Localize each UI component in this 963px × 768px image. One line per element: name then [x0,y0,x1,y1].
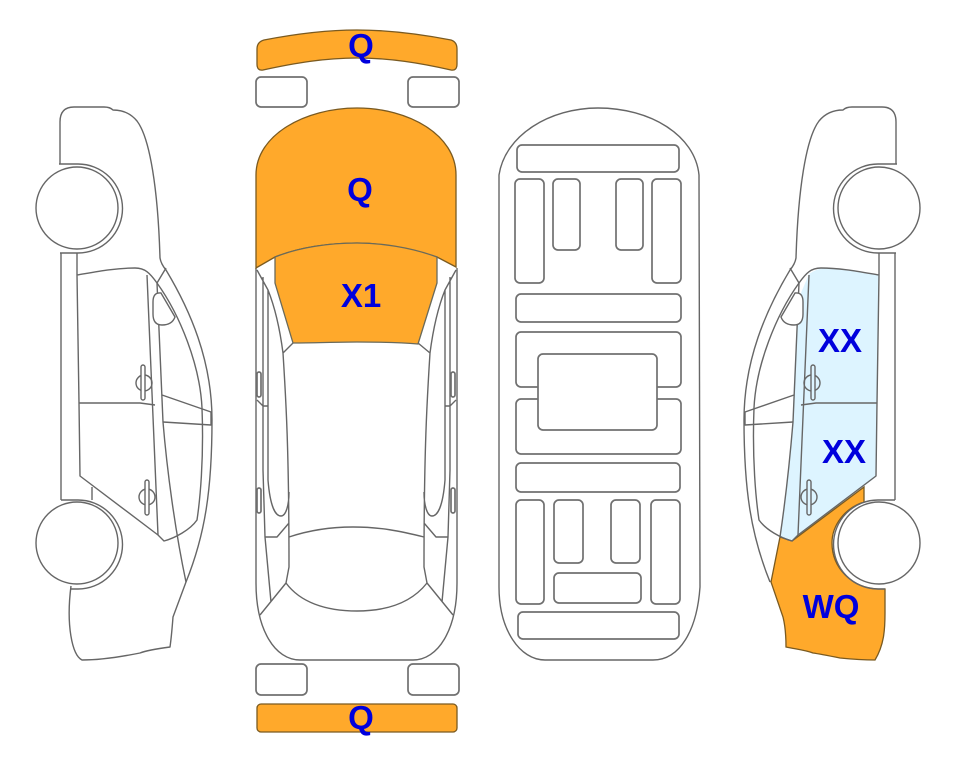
panel: rear inner right [611,500,640,563]
side mirror [781,293,803,325]
front wheel [36,167,118,249]
lights: top left [256,77,307,107]
door handle: lower [139,480,155,515]
side mirror [451,372,455,397]
label: top bumper: Q [348,27,374,64]
rear wheel [838,502,920,584]
panel: centre floor [538,354,657,430]
door window and body lines [753,268,879,541]
side mirror [257,488,261,513]
front wheel arch [59,164,122,253]
side mirror [153,293,175,325]
label: hood: Q [347,171,373,208]
windshield [275,243,437,344]
panel: spare wheel well [554,573,641,603]
panel: middle cross member [516,294,681,322]
rear wheel arch [834,500,895,589]
front wheel [838,167,920,249]
rear wheel arch [61,500,122,589]
panel: front inner left [553,179,580,250]
rear bumper [257,704,457,732]
door handle: lower [801,480,817,515]
rear wheel [36,502,118,584]
door dividers [780,275,809,537]
cabin lines left [257,270,293,615]
roof edge [79,268,166,405]
rear window [286,527,427,611]
panel: rear right rail [651,500,680,604]
panel: rear cross member [516,463,680,492]
lights: bottom right [408,664,459,695]
car side view: right [744,107,920,660]
panel: front left rail [515,179,544,283]
body outline [60,107,212,660]
underbody outline [499,108,700,660]
orange rear quarter panel [771,487,885,660]
label: rear bumper: Q [348,699,374,736]
front wheel arch [834,164,897,253]
panel: front right rail [652,179,681,283]
body outline [256,268,457,660]
top bumper [257,30,457,70]
car side view: left [36,107,212,660]
label: rear quarter: WQ [803,588,859,625]
hood [256,108,456,268]
label: front door: XX [818,322,862,359]
panel: rear left rail [516,500,544,604]
cabin lines right [418,270,456,615]
rocker panel [61,253,92,500]
car underbody view [499,108,700,660]
mirror strip [745,395,794,425]
lights: bottom left [256,664,307,695]
blue door panels [780,268,879,541]
door dividers [147,275,186,582]
panel: rear inner left [554,500,583,563]
panel: tail cross member [518,612,679,639]
roof edge [790,268,877,405]
panel: floor upper [516,332,681,387]
side mirror [451,488,455,513]
door handle: upper [136,365,152,400]
panel: floor lower [516,399,681,454]
label: windshield: X1 [341,277,381,314]
car top view [256,27,459,736]
panel: front inner right [616,179,643,250]
panel: front cross member [517,145,679,172]
side mirrors [257,372,261,397]
door window and body lines [77,268,203,541]
lights: top right [408,77,459,107]
rocker panel [879,253,895,500]
mirror strip [162,395,211,425]
body outline [744,107,896,582]
label: rear door: XX [822,433,866,470]
door handle: upper [804,365,820,400]
